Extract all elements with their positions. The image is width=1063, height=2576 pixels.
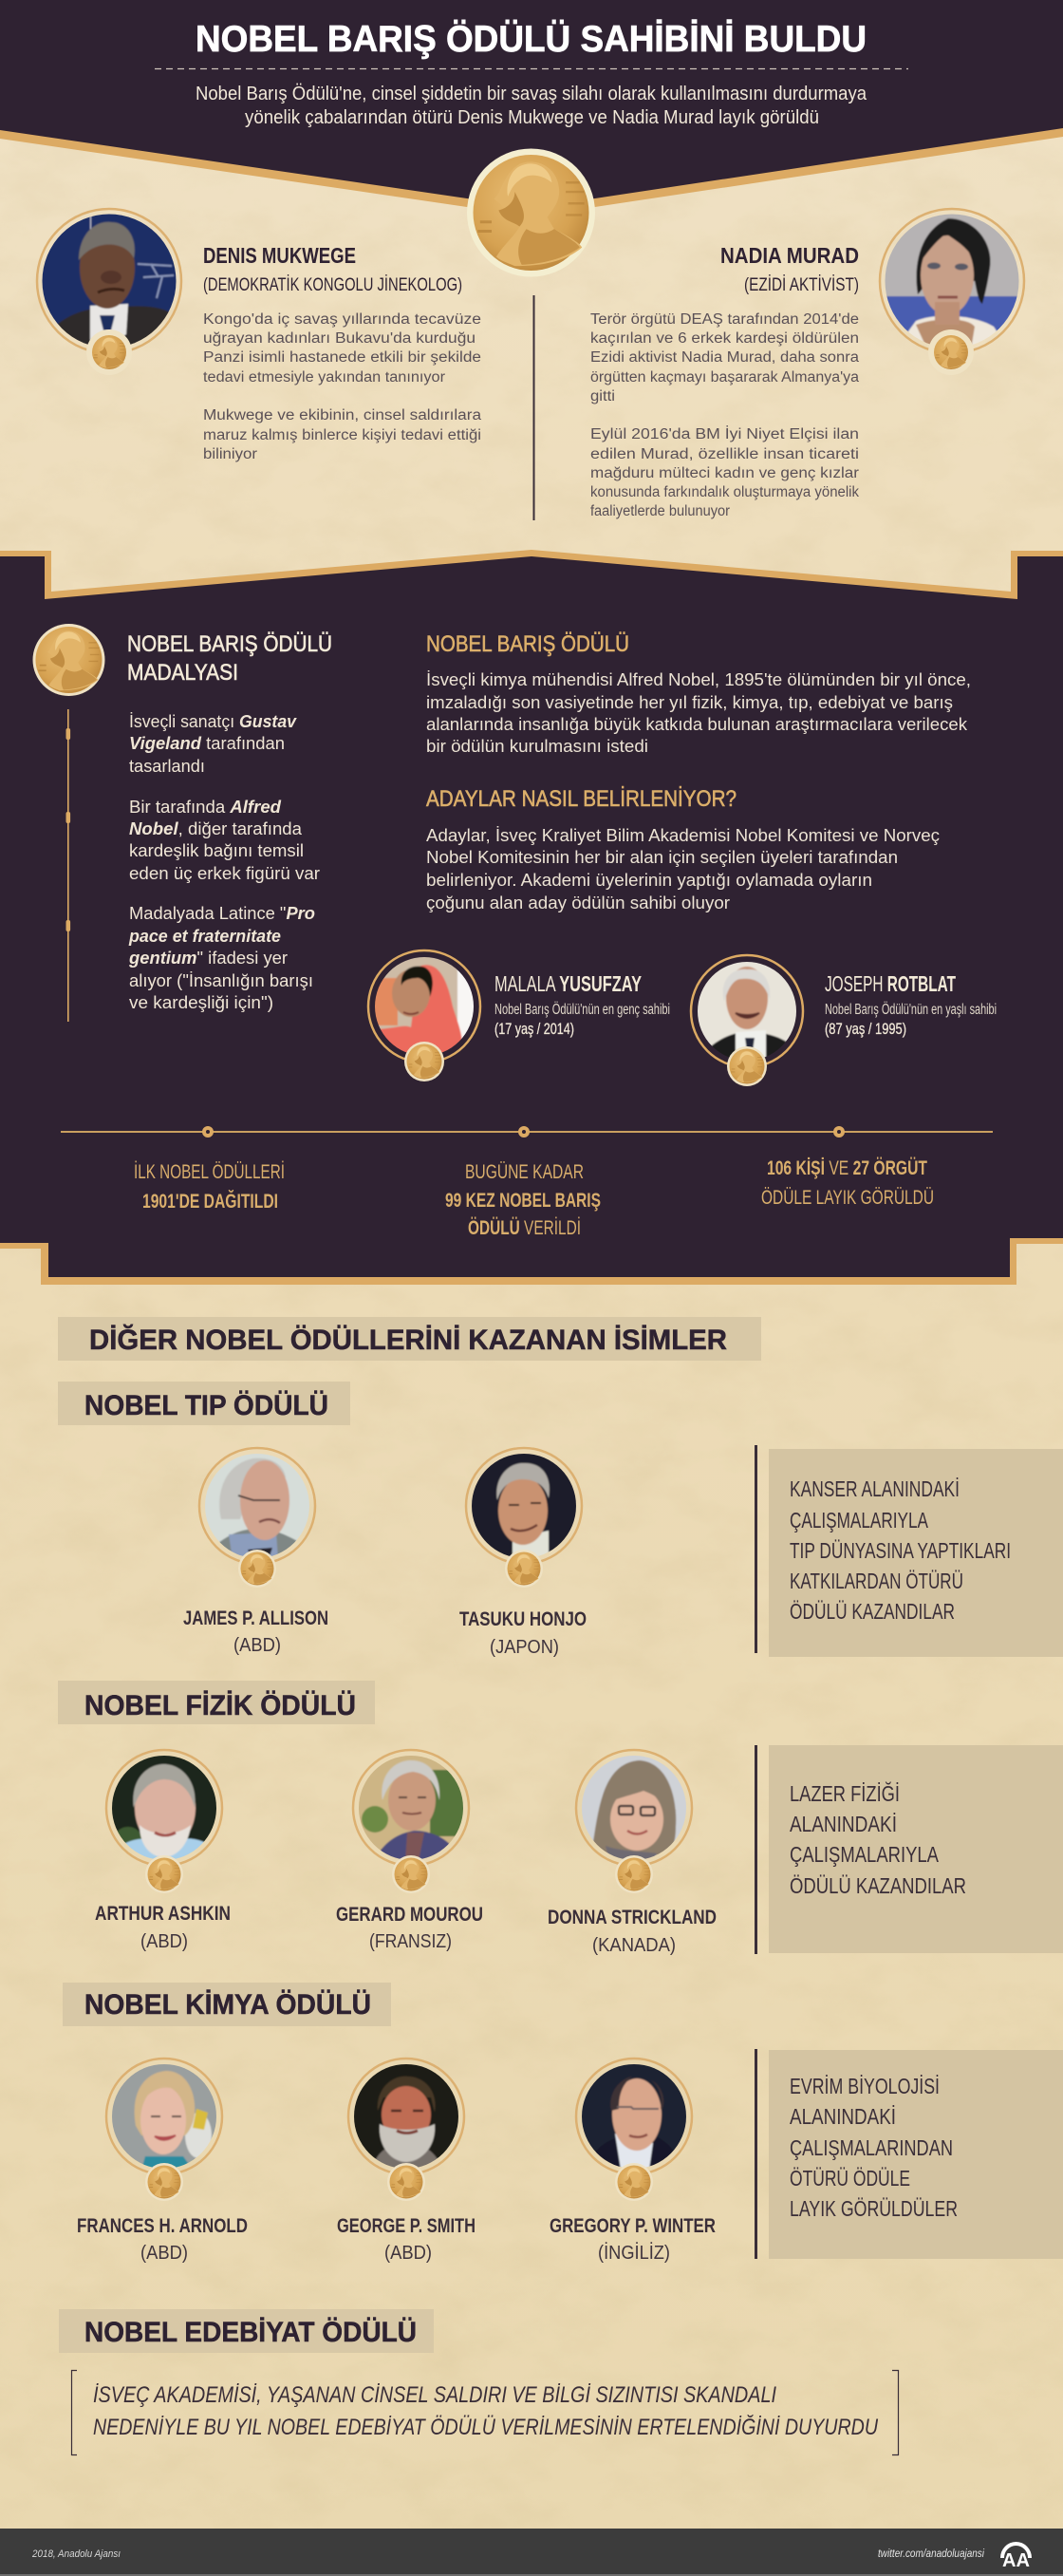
paragraph: prize history: imzaladığı son vasiyetinde her yıl fizik, kimya, tıp, edebiyat ve barış [426, 693, 953, 712]
portrait: James P. Allison [199, 1448, 315, 1588]
caption: Rotblat: (87 yaş / 1995) [825, 1021, 906, 1038]
caption: Malala [494, 971, 670, 1038]
stat: laureates: 106 KİŞİ VE 27 ÖRGÜT [767, 1157, 927, 1179]
name: Allison [183, 1608, 328, 1656]
name: Strickland: DONNA STRICKLAND [548, 1907, 717, 1928]
biography text: konusunda farkındalık oluşturmaya yönelik [590, 484, 859, 500]
name: Arnold: (ABD) [140, 2242, 188, 2264]
name: Smith: GEORGE P. SMITH [337, 2215, 476, 2237]
rationale box: ÖTÜRÜ ÖDÜLE [790, 2166, 910, 2191]
biography text: Ezidi aktivist Nadia Murad, daha sonra [590, 349, 859, 366]
rationale box: KATKILARDAN ÖTÜRÜ [790, 1569, 963, 1593]
name: Honjo: TASUKU HONJO [459, 1608, 587, 1630]
biography text: mağduru mülteci kadın ve genç kızlar [590, 465, 859, 481]
rationale box [755, 1445, 1063, 1657]
biography text: maruz kalmış binlerce kişiyi tedavi ettiği [203, 427, 481, 443]
medal description text: ve kardeşliği için") [129, 992, 273, 1012]
name: Allison: JAMES P. ALLISON [183, 1608, 328, 1629]
rationale box: EVRİM BİYOLOJİSİ [790, 2074, 940, 2098]
medal description text: Madalyada Latince "Pro [129, 903, 315, 923]
name: Strickland: (KANADA) [592, 1934, 676, 1956]
statement text: İSVEÇ AKADEMİSİ, YAŞANAN CİNSEL SALDIRI VE BİLGİ SIZINTISI SKANDALI [93, 2382, 776, 2408]
biography text: örgütten kaçmayı başararak Almanya'ya [590, 369, 859, 385]
statement text: NEDENİYLE BU YIL NOBEL EDEBİYAT ÖDÜLÜ VERİLMESİNİN ERTELENDİĞİNİ DUYURDU [93, 2415, 878, 2440]
paragraph: prize history: İsveçli kimya mühendisi Alfred Nobel, 1895'te ölümünden bir yıl önce, [426, 670, 971, 689]
medal description text: Bir tarafında Alfred [129, 797, 282, 817]
medal description text: İsveçli sanatçı Gustav [129, 711, 298, 731]
name: DENIS MUKWEGE [203, 243, 356, 268]
rationale box: ÇALIŞMALARINDAN [790, 2135, 953, 2160]
icon: medal [32, 624, 104, 696]
name: Arnold [77, 2215, 248, 2264]
portrait: Malala Yusufzay [368, 950, 480, 1081]
biography text: edilen Murad, özellikle insan ticareti [590, 446, 859, 462]
rationale box: LAYIK GÖRÜLDÜLER [790, 2196, 958, 2221]
paragraph: prize history: alanlarında insanlığa büyük katkıda bulunan araştırmacılara verilecek [426, 715, 968, 734]
top header band [0, 0, 1063, 216]
name: Strickland [548, 1907, 717, 1956]
name: Ashkin [95, 1903, 231, 1952]
role: (EZİDİ AKTİVİST) [744, 273, 859, 295]
name: Allison: (ABD) [233, 1634, 281, 1656]
biography text: Panzi isimli hastanede etkili bir şekilde [203, 349, 481, 366]
heading: medal [127, 631, 332, 686]
medal description text: Vigeland tarafından [129, 733, 285, 753]
section heading: other laureates: DİĞER NOBEL ÖDÜLLERİNİ KAZANAN İSİMLER [89, 1324, 727, 1356]
stat: first prizes: 1901'DE DAĞITILDI [142, 1190, 278, 1213]
role: (DEMOKRATİK KONGOLU JİNEKOLOG) [203, 273, 462, 295]
medal description text: Nobel, diğer tarafında [129, 818, 303, 838]
caption: Rotblat [825, 971, 997, 1038]
caption: Malala: (17 yaş / 2014) [494, 1021, 574, 1038]
name: Arnold: FRANCES H. ARNOLD [77, 2215, 248, 2237]
portrait: George P. Smith [348, 2059, 464, 2201]
name: Mourou: GERARD MOUROU [336, 1904, 483, 1926]
heading [58, 1681, 375, 1724]
name: Mourou [336, 1904, 483, 1952]
panel: Denis Mukwege [37, 209, 481, 462]
icon: large nobel medal [467, 148, 595, 277]
panel: medicine prize [58, 1382, 1063, 1658]
heading [63, 1983, 391, 2026]
footer [0, 2529, 1063, 2576]
stat: laureates: ÖDÜLE LAYIK GÖRÜLDÜ [761, 1187, 934, 1209]
name: Smith: (ABD) [384, 2242, 432, 2264]
medal description text [128, 711, 320, 1012]
biography text: kaçırılan ve 6 erkek kardeşi öldürülen [590, 330, 859, 347]
portrait: Nadia Murad [880, 209, 1024, 375]
bracket frame [72, 2370, 898, 2455]
medal description text: kardeşlik bağını temsil [129, 840, 304, 860]
paragraph: nominees [426, 826, 940, 912]
timeline line [66, 709, 70, 1022]
medal description text: eden üç erkek figürü var [129, 863, 320, 883]
stat: first prizes: İLK NOBEL ÖDÜLLERİ [134, 1161, 285, 1183]
name: Ashkin: ARTHUR ASHKIN [95, 1903, 231, 1925]
biography text: Kongo'da iç savaş yıllarında tecavüze [203, 311, 481, 328]
portrait: Frances H. Arnold [106, 2059, 222, 2201]
name: Honjo: (JAPON) [490, 1636, 559, 1658]
twitter handle: twitter.com/anadoluajansi [878, 2547, 984, 2560]
rationale box [755, 2049, 1063, 2259]
biography text: Terör örgütü DEAŞ tarafından 2014'de [590, 311, 859, 328]
panel: Nadia Murad [590, 209, 1024, 519]
paragraph: nominees: Nobel Komitesinin her bir alan için seçilen üyeleri tarafından [426, 848, 898, 867]
medal description text: gentium" ifadesi yer [128, 948, 288, 968]
heading: medal: NOBEL BARIŞ ÖDÜLÜ [127, 631, 332, 657]
paragraph: prize history: bir ödülün kurulmasını istedi [426, 737, 648, 756]
icon: AA logo: AA [1002, 2550, 1030, 2571]
panel: literature prize [59, 2309, 898, 2455]
name: Winter [550, 2215, 716, 2264]
portrait: Donna Strickland [576, 1750, 692, 1893]
name: Ashkin: (ABD) [140, 1930, 188, 1952]
medal description text: alıyor ("İnsanlığın barışı [129, 970, 313, 990]
subtitle [196, 84, 867, 128]
heading: how nominees are chosen: ADAYLAR NASIL BELİRLENİYOR? [426, 786, 737, 812]
biography text: uğrayan kadınları Bukavu'da kurduğu [203, 330, 476, 347]
panel: physics prize [58, 1681, 1063, 1956]
biography text: gitti [590, 388, 615, 404]
portrait: Tasuku Honjo [466, 1448, 582, 1588]
portrait: Arthur Ashkin [106, 1750, 222, 1893]
heading: medal: MADALYASI [127, 660, 238, 686]
rationale box: ÇALIŞMALARIYLA [790, 1508, 928, 1532]
stat: first prizes [134, 1161, 285, 1213]
caption: Rotblat: Nobel Barış Ödülü'nün en yaşlı sahibi [825, 1001, 997, 1018]
medal description text: pace et fraternitate [128, 926, 281, 946]
rationale box: ALANINDAKİ [790, 1812, 897, 1836]
title: NOBEL BARIŞ ÖDÜLÜ SAHİBİNİ BULDU [196, 19, 867, 60]
section heading: other laureates [58, 1317, 761, 1361]
heading [58, 1382, 350, 1425]
rationale box: ÇALIŞMALARIYLA [790, 1842, 940, 1867]
heading: NOBEL FİZİK ÖDÜLÜ [84, 1690, 356, 1721]
name: NADIA MURAD [720, 243, 859, 268]
heading: NOBEL EDEBİYAT ÖDÜLÜ [84, 2317, 417, 2348]
stat: 99 times [445, 1161, 601, 1239]
panel: dark info section [0, 550, 1063, 1285]
name: Smith [337, 2215, 476, 2264]
timeline [61, 1128, 993, 1136]
panel: chemistry prize [63, 1983, 1063, 2264]
subtitle: Nobel Barış Ödülü'ne, cinsel şiddetin bir savaş silahı olarak kullanılmasını durdurmaya [196, 84, 867, 104]
portrait: Denis Mukwege [37, 209, 181, 375]
rationale box [755, 1745, 1063, 1954]
rationale box: ÖDÜLÜ KAZANDILAR [790, 1873, 966, 1898]
biography text [590, 311, 859, 519]
rationale box: ALANINDAKİ [790, 2104, 896, 2129]
paragraph: prize history [426, 670, 971, 756]
paragraph: nominees: belirleniyor. Akademi üyelerinin yaptığı oylamada oyların [426, 871, 872, 890]
biography text: faaliyetlerde bulunuyor [590, 503, 730, 519]
statement text [93, 2382, 878, 2440]
stat: 99 times: BUGÜNE KADAR [465, 1161, 584, 1183]
paragraph: nominees: Adaylar, İsveç Kraliyet Bilim Akademisi Nobel Komitesi ve Norveç [426, 826, 940, 845]
rationale box: LAZER FİZİĞİ [790, 1781, 900, 1806]
heading [59, 2309, 434, 2353]
subtitle: yönelik çabalarından ötürü Denis Mukwege ve Nadia Murad layık görüldü [245, 107, 819, 128]
stat: laureates [761, 1157, 934, 1209]
portrait: Gregory P. Winter [576, 2059, 692, 2201]
heading: NOBEL TIP ÖDÜLÜ [84, 1390, 328, 1421]
portrait: Gerard Mourou [353, 1750, 469, 1893]
biography text: biliniyor [203, 446, 257, 462]
name: Honjo [459, 1608, 587, 1658]
credit: 2018, Anadolu Ajansı [31, 2548, 121, 2560]
portrait: Joseph Rotblat [691, 955, 803, 1086]
name: Winter: (İNGİLİZ) [598, 2242, 670, 2264]
name: Mourou: (FRANSIZ) [369, 1930, 452, 1952]
biography text: tedavi etmesiyle yakından tanınıyor [203, 369, 445, 385]
rationale box: ÖDÜLÜ KAZANDILAR [790, 1599, 955, 1624]
name: Winter: GREGORY P. WINTER [550, 2215, 716, 2237]
paragraph: nominees: çoğunu alan aday ödülün sahibi oluyor [426, 893, 730, 912]
biography text: Mukwege ve ekibinin, cinsel saldırılara [203, 407, 481, 423]
stat: 99 times: 99 KEZ NOBEL BARIŞ [445, 1190, 601, 1212]
caption: Malala: Nobel Barış Ödülü'nün en genç sahibi [494, 1001, 670, 1018]
heading: nobel peace prize: NOBEL BARIŞ ÖDÜLÜ [426, 631, 629, 657]
caption: Rotblat: JOSEPH ROTBLAT [825, 971, 956, 996]
caption: Malala: MALALA YUSUFZAY [494, 971, 642, 996]
rationale box: KANSER ALANINDAKİ [790, 1476, 960, 1501]
stat: 99 times: ÖDÜLÜ VERİLDİ [468, 1217, 581, 1239]
biography text [203, 311, 481, 462]
heading: NOBEL KİMYA ÖDÜLÜ [84, 1989, 371, 2021]
biography text: Eylül 2016'da BM İyi Niyet Elçisi ilan [590, 425, 859, 442]
medal description text: tasarlandı [129, 756, 205, 776]
